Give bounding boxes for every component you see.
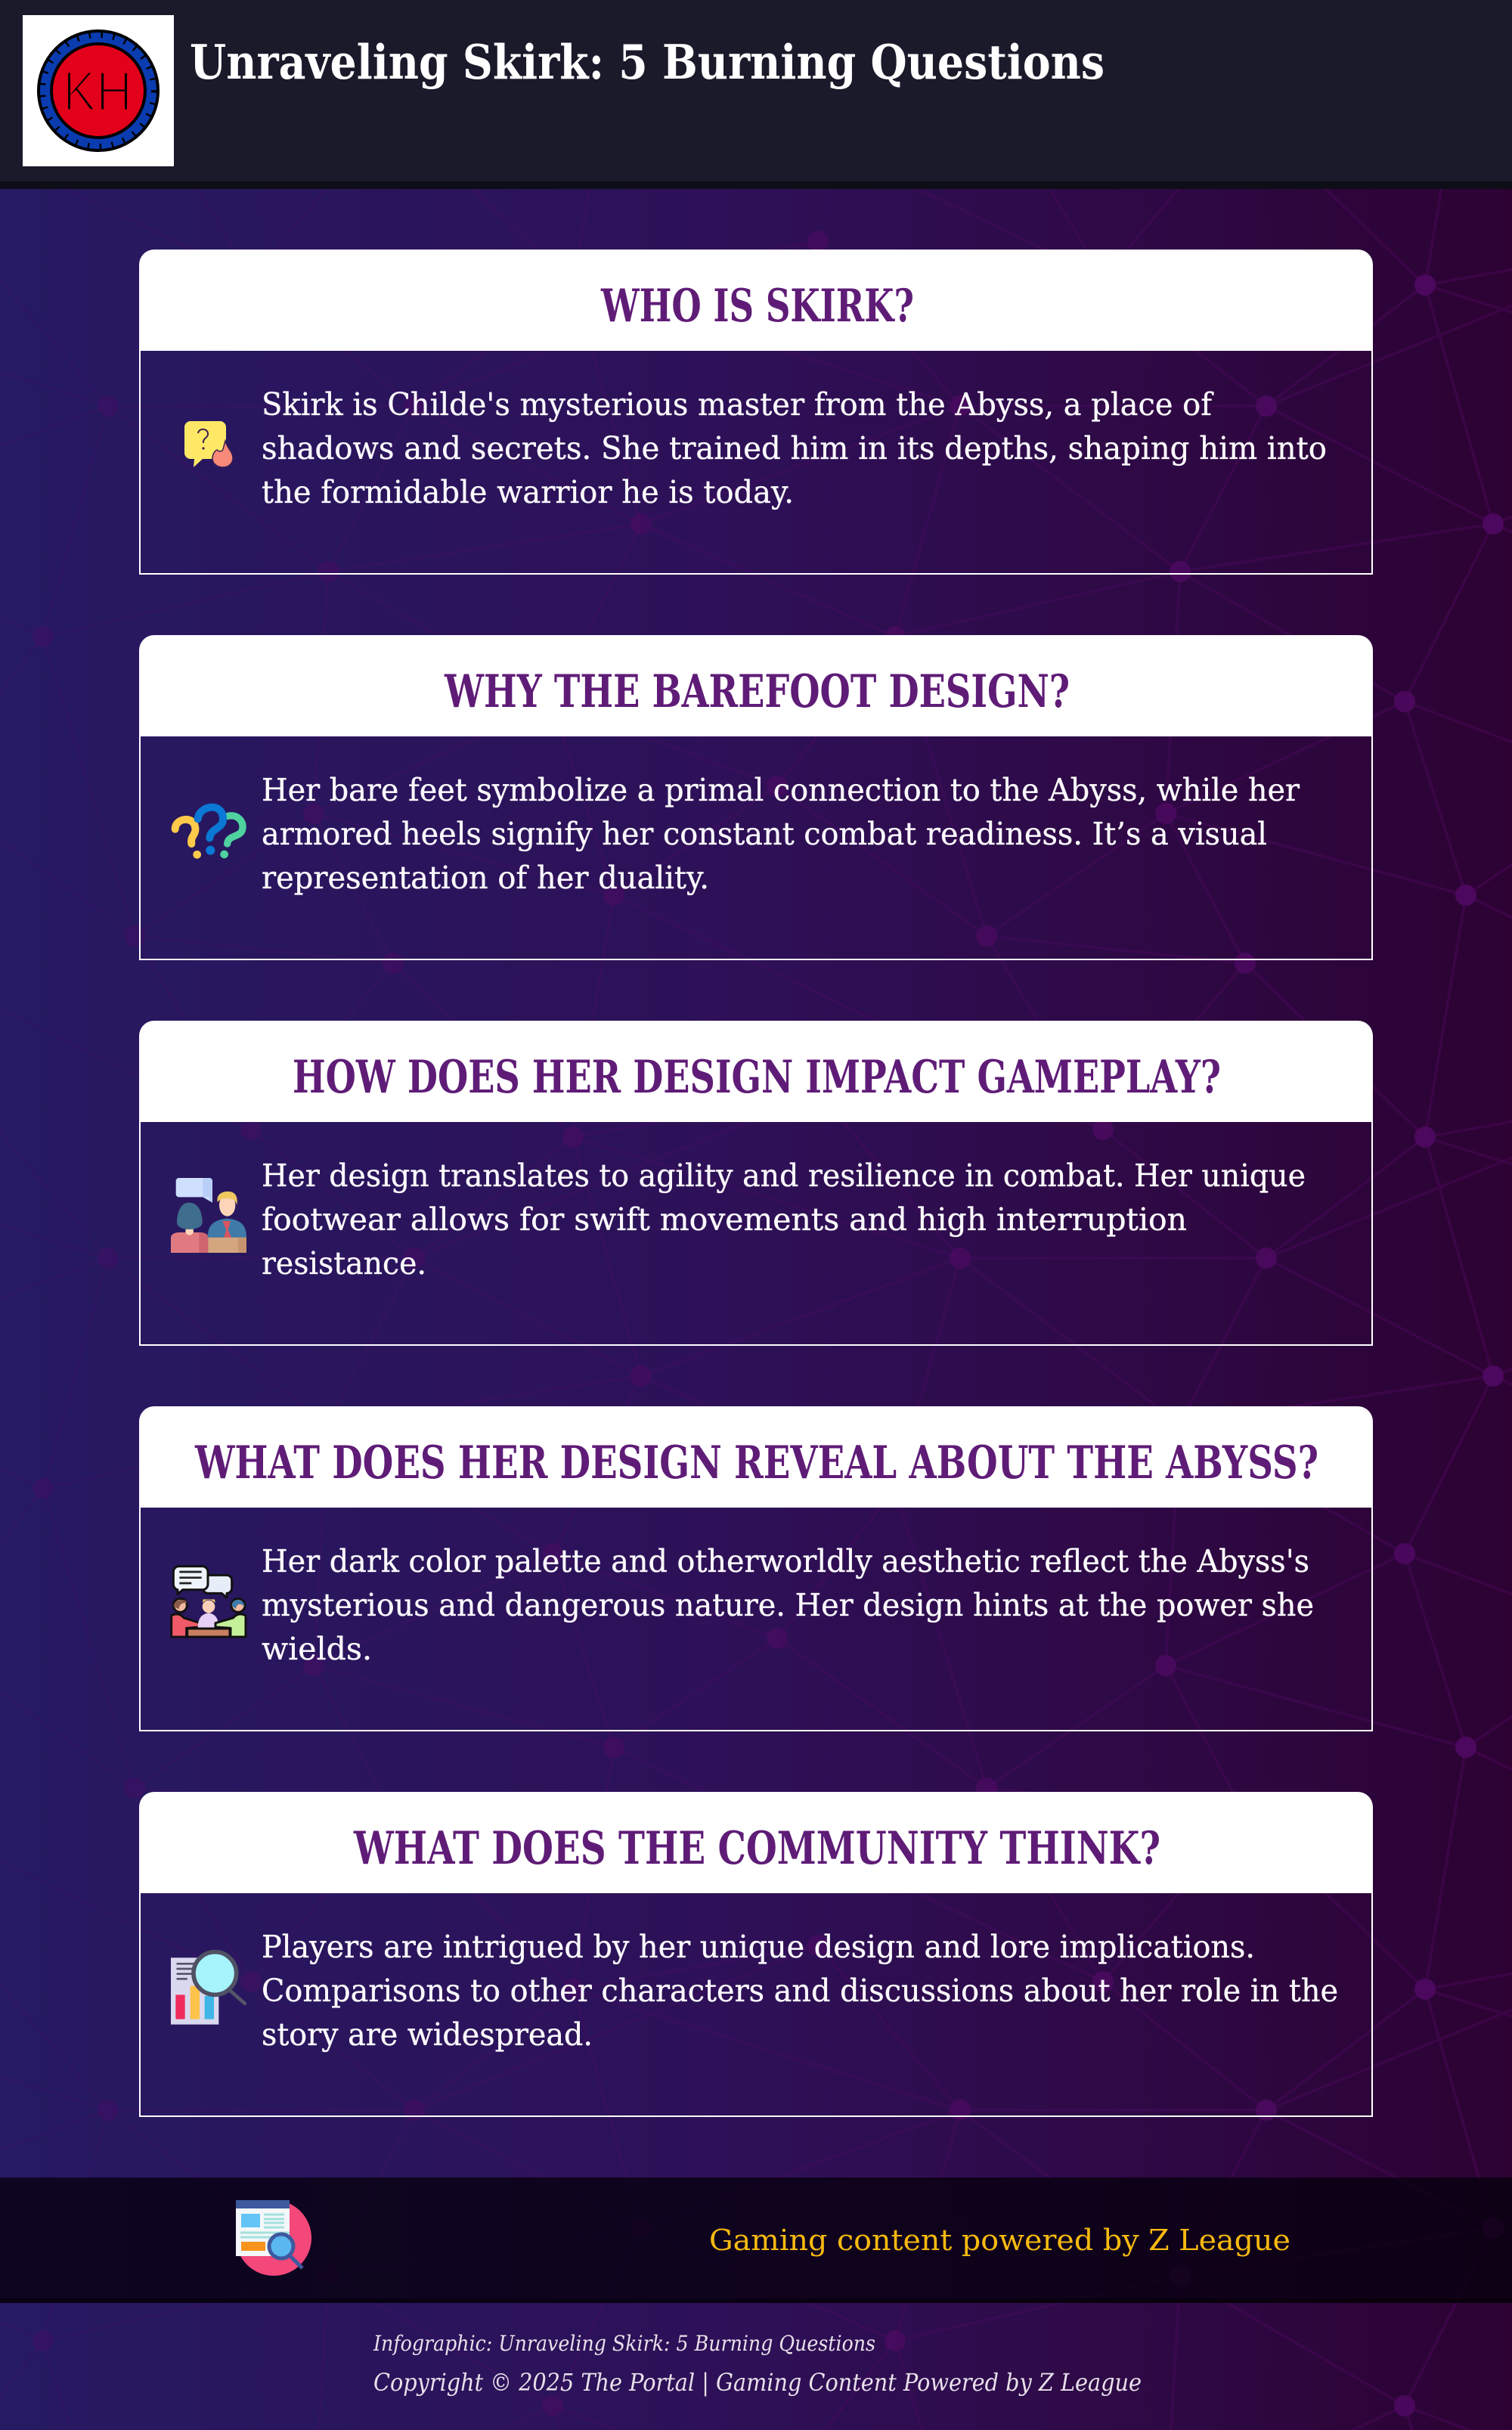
icon: report with magnifier — [171, 1952, 245, 2025]
body text: Her design translates to agility and resilience in combat. Her unique — [262, 1158, 1306, 1194]
body text: Her dark color palette and otherworldly aesthetic reflect the Abyss's — [262, 1543, 1309, 1579]
panel: why the barefoot design — [139, 635, 1373, 959]
body text: representation of her duality. — [262, 860, 709, 896]
header bar — [0, 0, 1512, 189]
icon: three question marks — [175, 807, 243, 859]
icon: web page with magnifier — [236, 2200, 311, 2276]
body text: Her bare feet symbolize a primal connection to the Abyss, while her — [262, 772, 1300, 808]
body text — [262, 772, 1300, 896]
heading: HOW DOES HER DESIGN IMPACT GAMEPLAY? — [293, 1051, 1221, 1104]
panel: who is skirk — [139, 250, 1373, 574]
body text — [262, 386, 1327, 510]
body text: Players are intrigued by her unique design and lore implications. — [262, 1929, 1255, 1965]
logo — [23, 15, 174, 166]
body text: the formidable warrior he is today. — [262, 474, 794, 510]
heading: WHY THE BAREFOOT DESIGN? — [444, 665, 1070, 718]
icon: two people talking — [171, 1178, 246, 1253]
body text: Skirk is Childe's mysterious master from the Abyss, a place of — [262, 386, 1214, 423]
icon: question bubble with flame — [184, 421, 233, 467]
footer credits — [373, 2331, 1142, 2397]
title: Unraveling Skirk: 5 Burning Questions — [190, 34, 1105, 90]
icon: group discussion — [172, 1567, 246, 1637]
logo: KH — [63, 60, 132, 122]
body text: armored heels signify her constant combat readiness. It’s a visual — [262, 816, 1267, 852]
footer band — [0, 2177, 1512, 2303]
body text: resistance. — [262, 1245, 426, 1282]
body text: shadows and secrets. She trained him in its depths, shaping him into — [262, 430, 1327, 466]
body text: Comparisons to other characters and discussions about her role in the — [262, 1973, 1338, 2009]
body text — [262, 1158, 1306, 1282]
body text: footwear allows for swift movements and high interruption — [262, 1201, 1187, 1238]
heading: WHAT DOES THE COMMUNITY THINK? — [353, 1822, 1160, 1875]
heading: WHO IS SKIRK? — [600, 280, 914, 333]
body text — [262, 1543, 1314, 1667]
body text: mysterious and dangerous nature. Her design hints at the power she — [262, 1587, 1314, 1623]
footer credits: Infographic: Unraveling Skirk: 5 Burning Questions — [373, 2331, 875, 2356]
panel: what does her design reveal about the abyss — [139, 1406, 1373, 1731]
panel: what does the community think — [139, 1792, 1373, 2116]
body text: wields. — [262, 1631, 372, 1667]
body text: story are widespread. — [262, 2016, 593, 2053]
panel: how does her design impact gameplay — [139, 1021, 1373, 1345]
body text — [262, 1929, 1338, 2053]
footer credits: Copyright © 2025 The Portal | Gaming Content Powered by Z League — [373, 2368, 1142, 2397]
sponsor text: Gaming content powered by Z League — [709, 2224, 1290, 2257]
